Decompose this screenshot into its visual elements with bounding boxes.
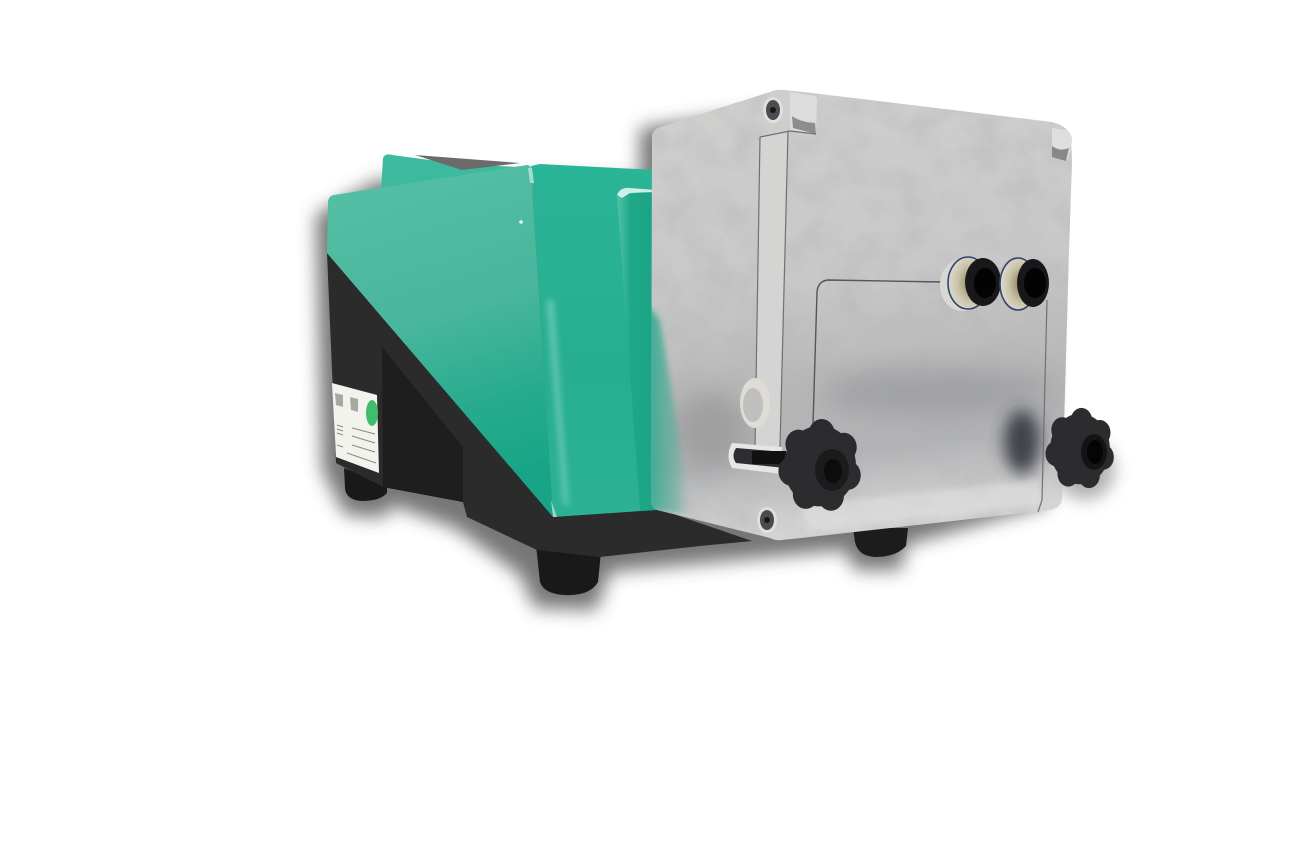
pump base: black housing <box>327 253 908 595</box>
housing body <box>651 90 1072 540</box>
base body <box>327 253 752 557</box>
lower highlight <box>551 500 557 517</box>
screw: top <box>763 97 783 123</box>
product photo illustration: pump <box>303 90 1124 623</box>
foot: right <box>853 528 908 557</box>
knob: right <box>1034 392 1128 504</box>
vertical sheen <box>546 300 569 505</box>
green cover <box>327 154 656 517</box>
recess top highlight <box>617 188 656 198</box>
right face <box>531 164 656 517</box>
green sticker <box>366 400 378 426</box>
knob shadow <box>1055 440 1115 500</box>
rear green panel <box>381 154 537 192</box>
sight glass <box>740 378 770 428</box>
push-in connector: right <box>1000 258 1049 310</box>
top bracket <box>790 92 817 134</box>
label markings <box>335 393 358 412</box>
foot: front <box>536 545 601 595</box>
dark smudge <box>1004 410 1040 474</box>
recessed strip <box>617 190 656 511</box>
label sheet <box>332 383 379 473</box>
push-in connector: left <box>940 257 1001 311</box>
corner highlight <box>528 168 534 183</box>
housing seam lines <box>755 131 1047 512</box>
door outline <box>813 280 942 425</box>
aluminium housing <box>648 88 1074 542</box>
inset dark face <box>382 347 463 502</box>
left sloped face <box>327 165 553 517</box>
green translucent wedge <box>651 304 688 516</box>
dark reflection band <box>820 368 1050 416</box>
bottom bright band <box>804 480 1040 526</box>
right bracket <box>1052 128 1072 160</box>
brushed mottling and reflections <box>651 104 1052 534</box>
display strip <box>415 155 520 170</box>
foot: left <box>344 468 387 501</box>
screw: bottom <box>757 507 777 533</box>
rating label on base <box>332 383 379 473</box>
knob: left <box>764 401 878 529</box>
slot with shaft <box>728 443 786 474</box>
specks <box>519 220 523 224</box>
drop shadow <box>316 110 1052 610</box>
vertical panel strip <box>755 132 788 447</box>
